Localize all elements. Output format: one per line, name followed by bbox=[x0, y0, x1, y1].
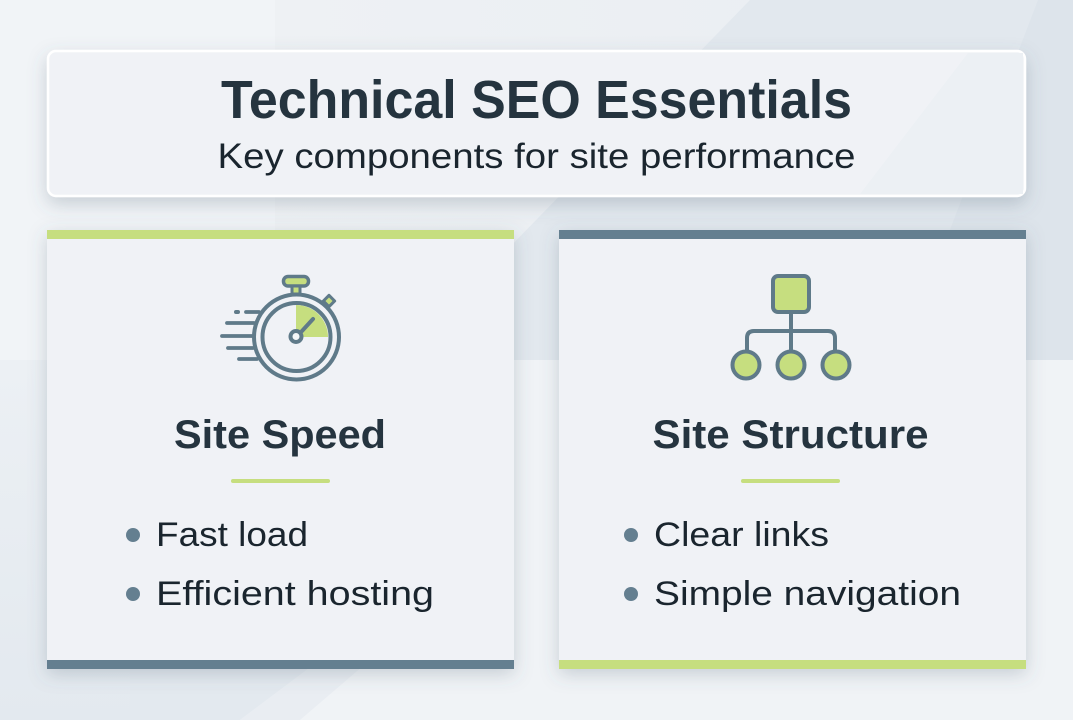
bullet list: site speed: Fast load bbox=[156, 516, 308, 554]
title: Technical SEO Essentials bbox=[221, 70, 852, 130]
icon: stopwatch bbox=[222, 276, 339, 380]
bullet list: site speed bbox=[126, 516, 434, 613]
bullet list: site speed: Efficient hosting bbox=[156, 575, 434, 613]
subtitle: Key components for site performance bbox=[218, 137, 856, 176]
bullet list: site structure bbox=[624, 516, 961, 613]
panel: site speed bbox=[47, 230, 514, 669]
bullet list: site structure: Simple navigation bbox=[654, 575, 961, 613]
icon: site hierarchy bbox=[732, 276, 850, 378]
bullet list: site structure: Clear links bbox=[654, 516, 829, 554]
heading: site structure: Site Structure bbox=[652, 413, 928, 457]
title panel bbox=[48, 51, 1025, 196]
panel: site structure bbox=[559, 230, 1026, 669]
heading: site speed: Site Speed bbox=[174, 413, 386, 457]
